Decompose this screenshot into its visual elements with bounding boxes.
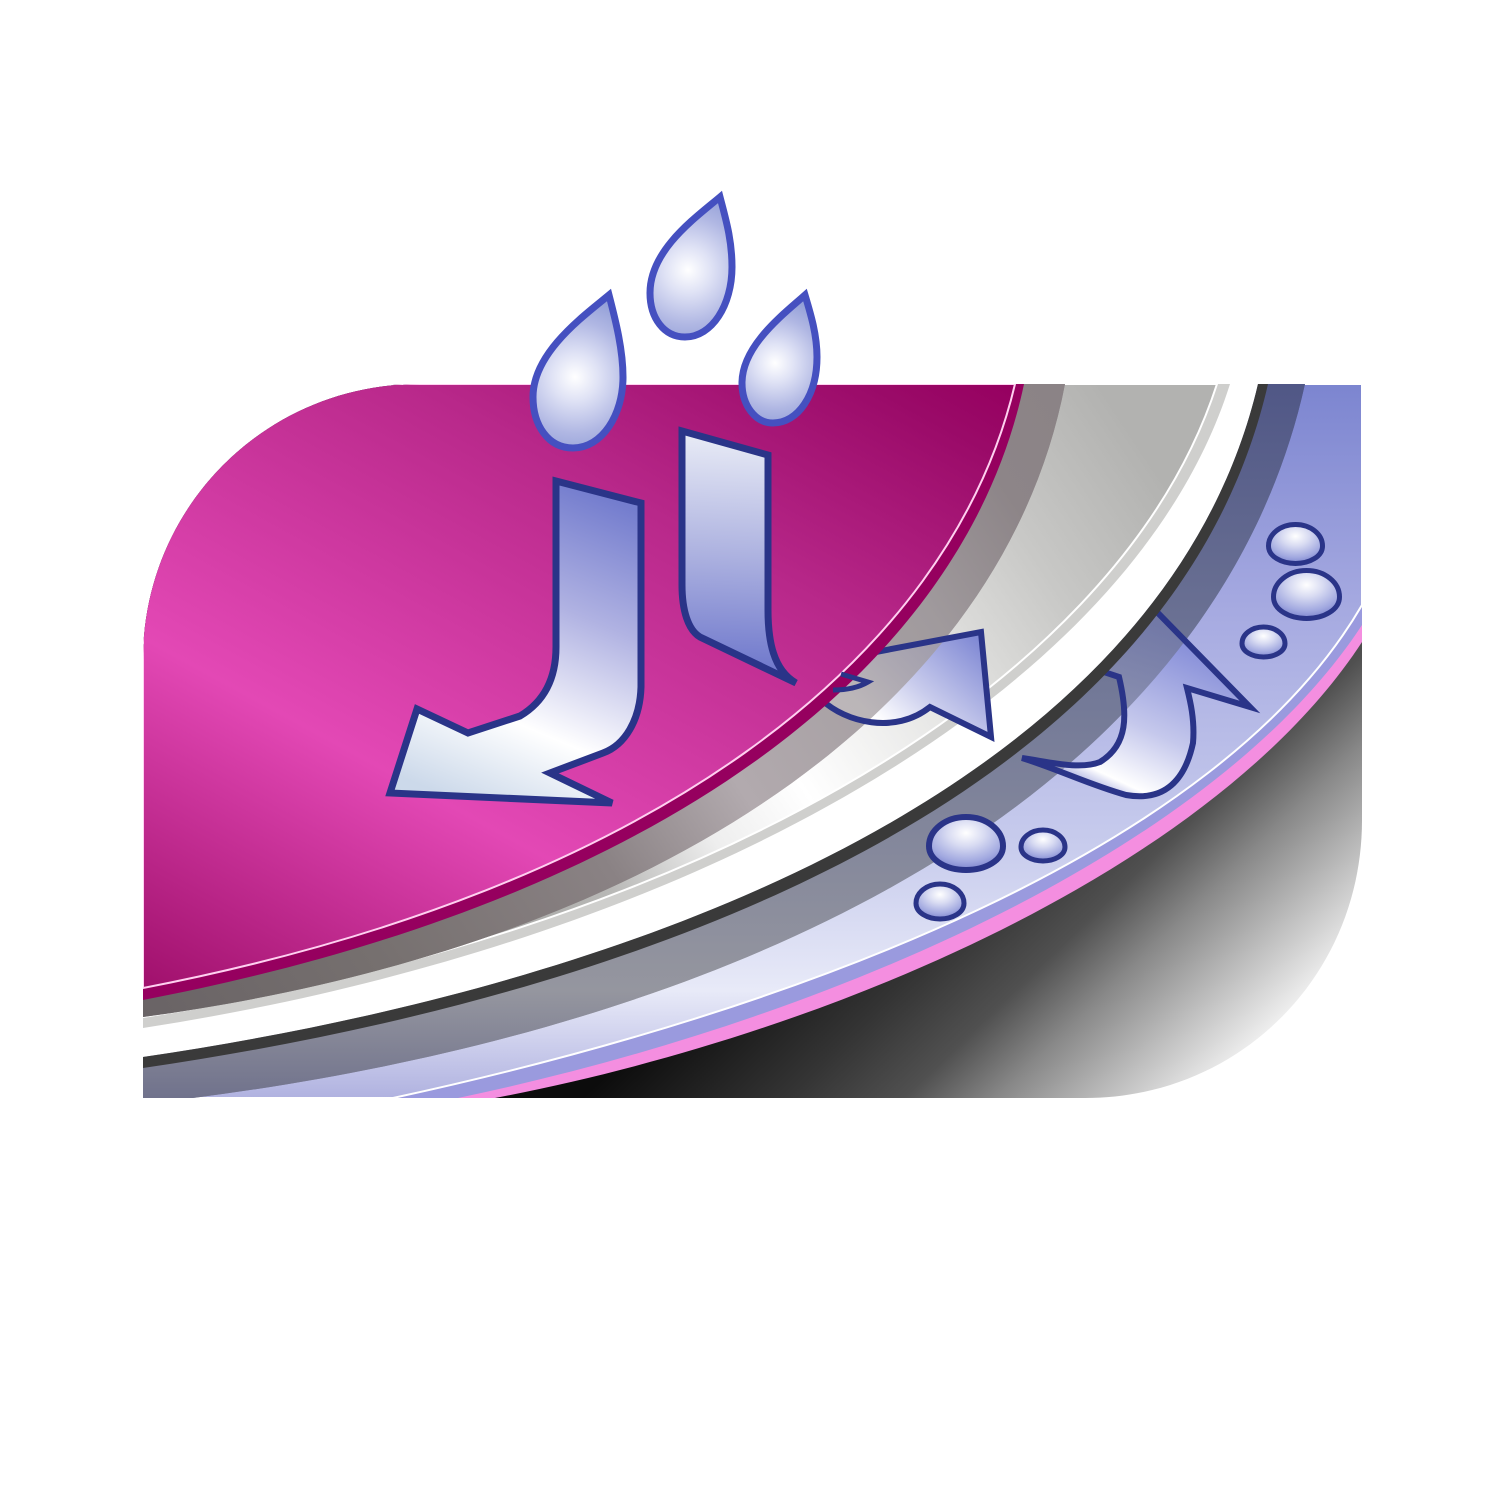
layer: pale grey strip xyxy=(143,384,1230,1028)
layer: slate band xyxy=(143,384,1305,1098)
arrow: lower-layer arrow outline xyxy=(1022,610,1250,796)
layer: periwinkle strip xyxy=(398,607,1362,1098)
overlay: translucent slate band over arrow xyxy=(143,384,1305,1098)
icon: moisture beads upper right xyxy=(1242,524,1340,657)
arrow: lower-layer arrow fill xyxy=(1056,616,1240,794)
arrow: large downward arrow turning left xyxy=(390,481,641,803)
layer: dark charcoal strip xyxy=(143,384,1268,1068)
arrow: crossing arrow fill xyxy=(829,636,988,732)
layer: lavender band xyxy=(143,384,1362,1098)
layer: pink strip xyxy=(458,625,1362,1098)
icon: left water drop xyxy=(533,295,623,448)
layer: magenta top fabric xyxy=(143,384,1015,988)
overlay: translucent grey band over arrow xyxy=(143,384,1065,1017)
arrow: crossing arrow outline xyxy=(822,632,991,737)
icon: right water drop xyxy=(742,295,817,423)
illustration: layered fabric moisture diagram xyxy=(143,190,1362,1098)
icon: moisture beads lower left xyxy=(916,817,1065,919)
arrow: tail hook of crossing arrow xyxy=(833,674,868,690)
layer: dark grey gradient band xyxy=(143,384,1065,1017)
layer: black base xyxy=(143,384,1362,1098)
layer: white band xyxy=(143,384,1258,1057)
layer: dark magenta edge xyxy=(143,384,1024,1000)
arrow: short downward arrow xyxy=(682,431,796,683)
layered fabric panel xyxy=(143,384,1362,1098)
layer: light grey gradient band xyxy=(143,384,1217,1017)
icon: centre water drop xyxy=(650,197,732,337)
